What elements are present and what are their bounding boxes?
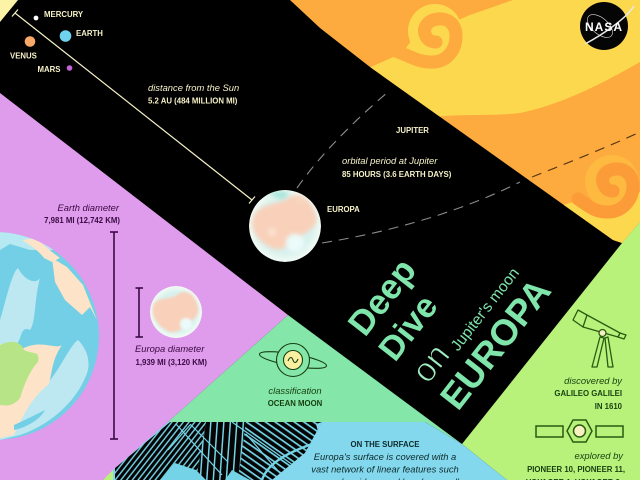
text: Europa diameter: 1,939 MI (3,120 KM) <box>136 358 207 367</box>
logo: NASA: NASA <box>585 20 623 34</box>
icon: ocean moon <box>258 344 328 376</box>
text: classification: OCEAN MOON <box>268 399 323 408</box>
swirl: lower <box>578 155 639 212</box>
text: Europa diameter <box>135 343 207 367</box>
text: distance from the Sun <box>148 82 239 106</box>
panel: top-left corner <box>0 0 18 22</box>
title: Deep Dive on Jupiter's moon Europa: Deep <box>341 251 424 343</box>
text: Earth diameter: Earth diameter <box>58 202 120 213</box>
title: Deep Dive on Jupiter's moon Europa: on <box>404 337 458 390</box>
panel: Jupiter surface <box>280 0 640 250</box>
panel: pink size comparison <box>0 93 288 480</box>
panel: green classification <box>168 315 462 444</box>
bar: Europa diameter <box>136 288 143 337</box>
planet: Mercury <box>34 10 84 20</box>
planet: Earth: EARTH <box>76 29 103 38</box>
label: Jupiter: JUPITER <box>396 126 429 135</box>
text: orbital period <box>342 155 452 179</box>
text: explored by: explored by <box>575 450 624 461</box>
title: Deep Dive on Jupiter's moon Europa: EUROPA <box>432 271 559 417</box>
title: Deep Dive on Jupiter's moon Europa <box>341 251 559 417</box>
planet: Venus: VENUS <box>10 52 37 60</box>
orbit: over Jupiter <box>532 132 640 177</box>
text: Earth diameter <box>44 202 120 225</box>
text: discovered by: GALILEO GALILEI <box>554 389 622 398</box>
panel: lime discovery <box>462 222 640 480</box>
text: explored by: PIONEER 10, PIONEER 11, <box>527 465 625 474</box>
title: Deep Dive on Jupiter's moon Europa: Dive <box>371 288 446 368</box>
icon: spacecraft <box>536 420 623 442</box>
panel: blue surface <box>113 422 507 480</box>
logo: NASA <box>580 2 634 50</box>
text: discovered by: discovered by <box>564 375 623 386</box>
planet: Mars: MARS <box>38 65 60 74</box>
planet: Mercury: MERCURY <box>44 10 84 19</box>
planet: Europa small <box>150 286 202 338</box>
line: distance from the Sun <box>12 10 255 204</box>
text: orbital period: 85 HOURS (3.6 EARTH DAYS) <box>342 170 452 179</box>
orbit: Europa lower <box>322 182 520 243</box>
text: orbital period: orbital period at Jupiter <box>342 155 438 166</box>
text: Earth diameter: 7,981 MI (12,742 KM) <box>44 216 120 225</box>
swirl: upper <box>398 4 462 62</box>
text: explored by <box>526 450 625 480</box>
text: on the surface: Europa's surface is covered with a <box>314 451 456 462</box>
text: classification: classification <box>268 385 322 396</box>
planet: Venus <box>10 36 37 60</box>
text: classification <box>268 385 323 408</box>
planet: Earth large <box>0 232 99 440</box>
text: on the surface: ON THE SURFACE <box>351 440 419 449</box>
text: distance from the Sun: distance from the Sun <box>148 82 239 93</box>
title: Deep Dive on Jupiter's moon Europa: Jupiter's moon <box>448 265 523 354</box>
bar: Earth diameter <box>110 232 118 439</box>
text: Europa diameter: Europa diameter <box>135 343 205 354</box>
image: surface of Europa <box>115 422 322 480</box>
text: discovered by <box>554 375 623 411</box>
orbit: Europa upper <box>297 92 388 188</box>
planet: Earth <box>60 29 103 42</box>
panel: lime corner <box>103 470 118 480</box>
text: on the surface: vast network of linear features such <box>311 464 459 474</box>
planet: Mars <box>38 65 72 74</box>
planet: Europa large <box>249 190 321 262</box>
text: distance from the Sun: 5.2 AU (484 MILLION MI) <box>148 96 238 106</box>
text: discovered by: IN 1610 <box>595 402 623 411</box>
icon: telescope <box>573 310 626 367</box>
label: Europa: EUROPA <box>327 205 360 214</box>
text: on the surface <box>311 440 460 480</box>
